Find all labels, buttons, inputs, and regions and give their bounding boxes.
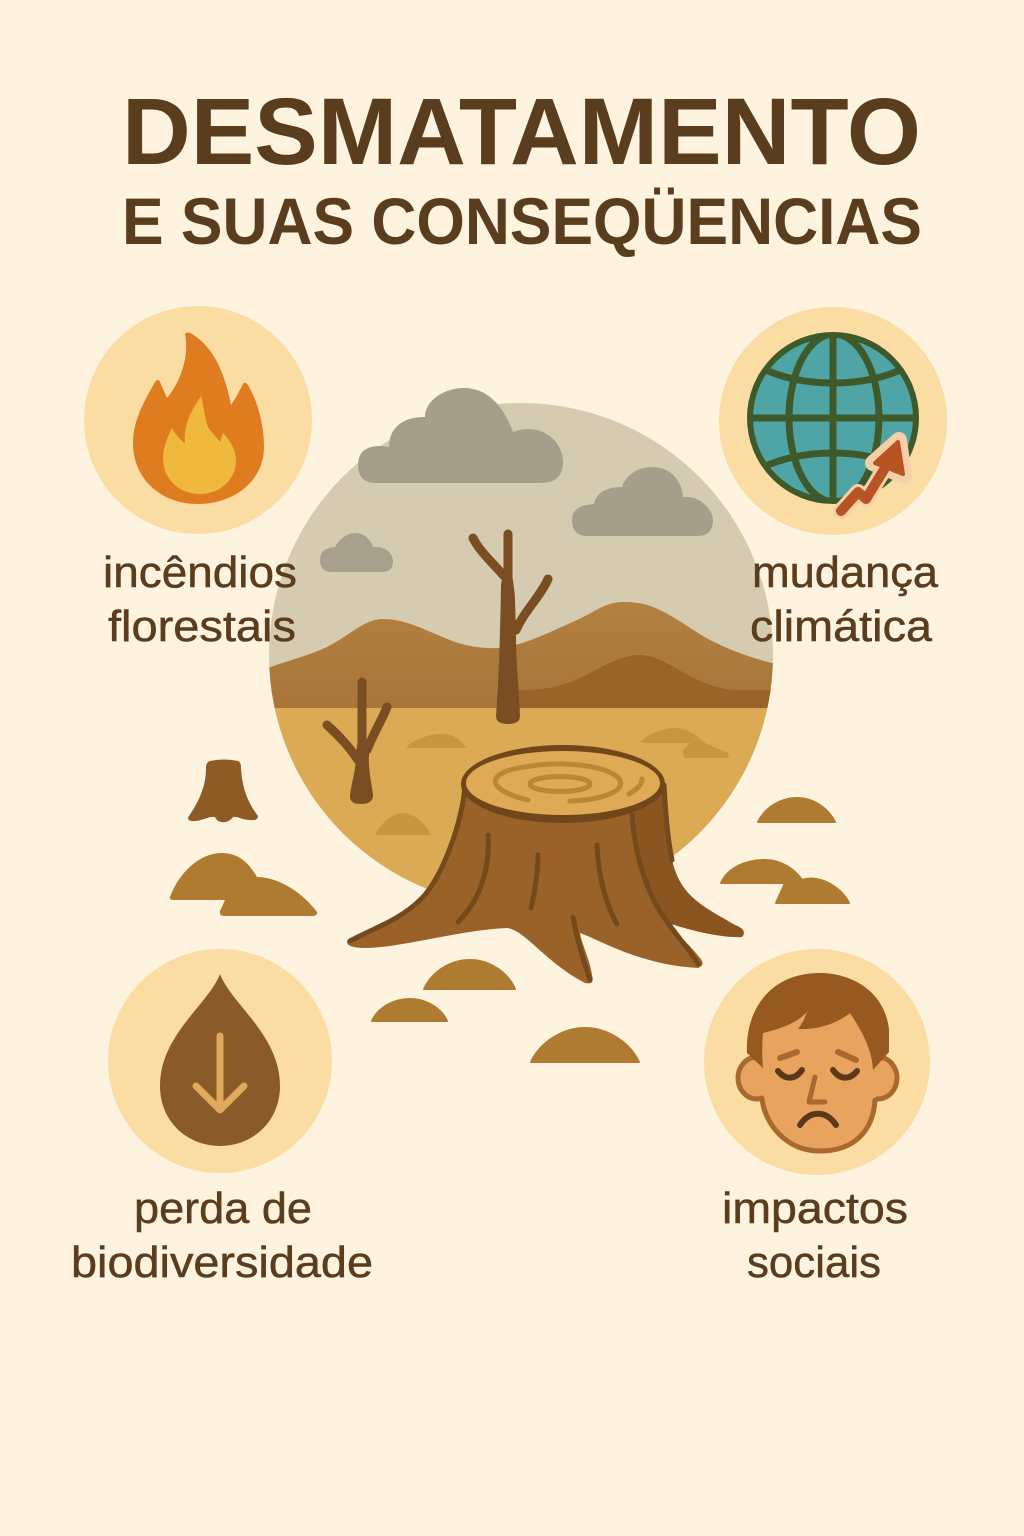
label: perda de — [134, 1184, 312, 1233]
panel: mudança climática — [719, 307, 947, 651]
label — [103, 548, 297, 651]
subtitle: E SUAS CONSEQÜENCIAS — [122, 184, 922, 258]
icon: sad face — [738, 973, 897, 1153]
icon: flame — [133, 332, 264, 504]
mounds: right — [721, 798, 849, 903]
tree stump — [347, 745, 744, 983]
dead tree: tall — [473, 534, 548, 724]
icon: globe with rising arrow — [749, 333, 917, 511]
icon: drop with down arrow — [160, 974, 280, 1146]
central deforested landscape — [260, 388, 785, 920]
stump top — [461, 745, 665, 823]
cloud: small — [320, 533, 393, 572]
cloud: large — [358, 388, 563, 483]
cloud: medium — [572, 467, 713, 536]
label — [750, 548, 939, 651]
mounds: bottom — [372, 960, 639, 1062]
label — [722, 1184, 908, 1287]
label: mudança — [752, 548, 939, 597]
panel: perda de biodiversidade — [71, 949, 373, 1287]
ground mounds inside circle — [375, 728, 729, 835]
scattered small stump — [188, 760, 258, 822]
panel: impactos sociais — [704, 949, 930, 1287]
label: incêndios — [103, 548, 297, 597]
infographic — [74, 98, 947, 1278]
label: impactos — [722, 1184, 908, 1233]
title: DESMATAMENTO — [122, 79, 921, 185]
label — [71, 1184, 373, 1287]
label: climática — [750, 602, 933, 651]
dead tree: small — [327, 682, 387, 804]
panel: incêndios florestais — [84, 306, 312, 651]
label: biodiversidade — [71, 1238, 373, 1287]
label: florestais — [108, 602, 296, 651]
label: sociais — [747, 1238, 881, 1287]
mounds: left — [170, 853, 317, 916]
